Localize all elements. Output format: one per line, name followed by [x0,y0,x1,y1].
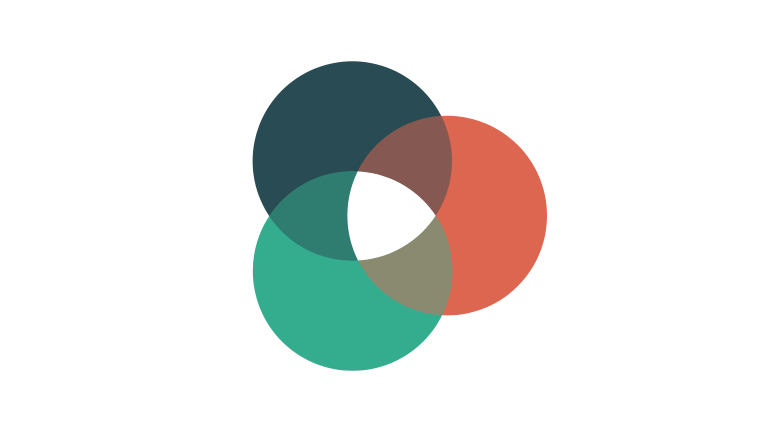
overlap: dark and red [358,116,452,216]
circle: coral red [347,116,547,315]
overlap: dark and green [269,171,436,261]
overlap: white centre [347,171,436,260]
circle: green [253,171,452,371]
circle: dark teal [253,61,452,261]
overlap: red and green [347,172,452,316]
venn diagram [252,61,547,371]
